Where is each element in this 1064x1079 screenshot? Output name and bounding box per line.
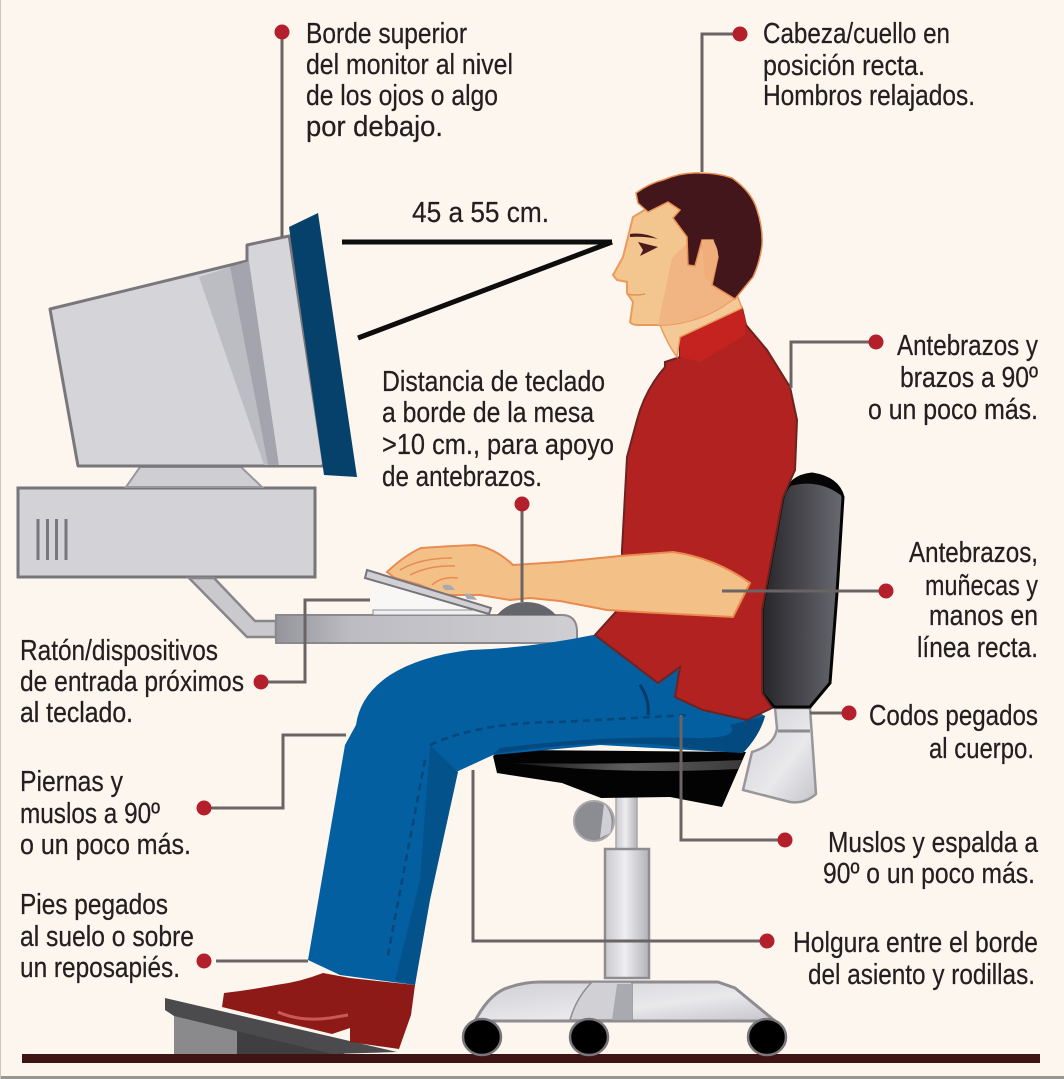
text: head and neck: Hombros relajados. (763, 80, 975, 112)
callout line: legs (196, 735, 346, 816)
text: keyboard distance: a borde de la mesa (382, 397, 595, 429)
text: thighs and back (823, 827, 1039, 890)
callout line: elbows (810, 706, 856, 720)
icon: collar (680, 308, 746, 362)
text: legs: muslos a 90º (20, 798, 160, 830)
text: forearms (909, 537, 1038, 664)
text: legs: Piernas y (20, 766, 123, 798)
icon: head and neck (613, 173, 762, 357)
text: keyboard distance: Distancia de teclado (382, 366, 605, 398)
chair seat (493, 750, 746, 807)
icon: keyboard (365, 570, 491, 615)
text: keyboard distance (382, 366, 614, 493)
callout line: seat clearance (473, 770, 774, 948)
text: forearms: manos en (929, 600, 1038, 632)
text: head and neck (763, 18, 975, 112)
icon: shoe (222, 973, 415, 1049)
callout line: keyboard distance (514, 496, 530, 602)
text: forearms: línea recta. (917, 632, 1038, 664)
callout line: feet (196, 954, 308, 968)
text: feet: al suelo o sobre (20, 921, 194, 953)
text: forearms: muñecas y (925, 570, 1038, 602)
text: feet: Pies pegados (20, 889, 168, 921)
text: arms: brazos a 90º (900, 362, 1038, 394)
callout line: arms (791, 334, 884, 388)
text: elbows: al cuerpo. (929, 733, 1034, 765)
callout line: monitor (274, 24, 290, 237)
callout line: head (702, 26, 748, 172)
text: feet: un reposapiés. (20, 952, 180, 984)
text: monitor height: por debajo. (306, 111, 443, 143)
text: legs: o un poco más. (20, 829, 191, 861)
callout line: mouse (254, 600, 370, 690)
text: mouse: Ratón/dispositivos (20, 635, 218, 667)
icon: sight lines (342, 242, 612, 338)
text: arms: Antebrazos y (897, 330, 1038, 362)
text: elbows (869, 700, 1038, 765)
icon: computer CPU case (18, 488, 315, 577)
callout line: forearms (722, 584, 894, 598)
text: viewing distance: 45 a 55 cm. (412, 197, 549, 229)
icon: mouse (497, 602, 556, 615)
text: mouse: de entrada próximos (20, 666, 244, 698)
text: arms (868, 330, 1038, 426)
text: arms: o un poco más. (868, 394, 1038, 426)
icon: red shirt torso (595, 308, 797, 720)
chair pedestal (463, 796, 786, 1055)
icon: monitor arm and keyboard tray (189, 578, 577, 643)
text: monitor height (306, 18, 513, 143)
floor line (22, 1054, 1040, 1063)
text: monitor height: del monitor al nivel (306, 49, 513, 81)
text: mouse (20, 635, 244, 729)
text: keyboard distance: de antebrazos. (382, 461, 542, 493)
text: mouse: al teclado. (20, 697, 133, 729)
text: monitor height: de los ojos o algo (306, 80, 498, 112)
text: head and neck: posición recta. (763, 50, 925, 82)
icon: footrest (165, 998, 397, 1054)
chair backrest bracket (743, 708, 816, 802)
text: feet (20, 889, 194, 984)
text: legs (20, 766, 191, 861)
callout line: thighs and back (681, 715, 792, 848)
text: forearms: Antebrazos, (909, 537, 1038, 569)
text: seat clearance (793, 927, 1038, 991)
text: head and neck: Cabeza/cuello en (763, 18, 950, 50)
icon: monitor (50, 213, 357, 487)
icon: jeans legs (308, 635, 765, 985)
text: keyboard distance: >10 cm., para apoyo (382, 429, 614, 461)
text: monitor height: Borde superior (306, 18, 467, 50)
icon: forearm and hand (387, 545, 750, 617)
icon: backrest (762, 473, 843, 707)
